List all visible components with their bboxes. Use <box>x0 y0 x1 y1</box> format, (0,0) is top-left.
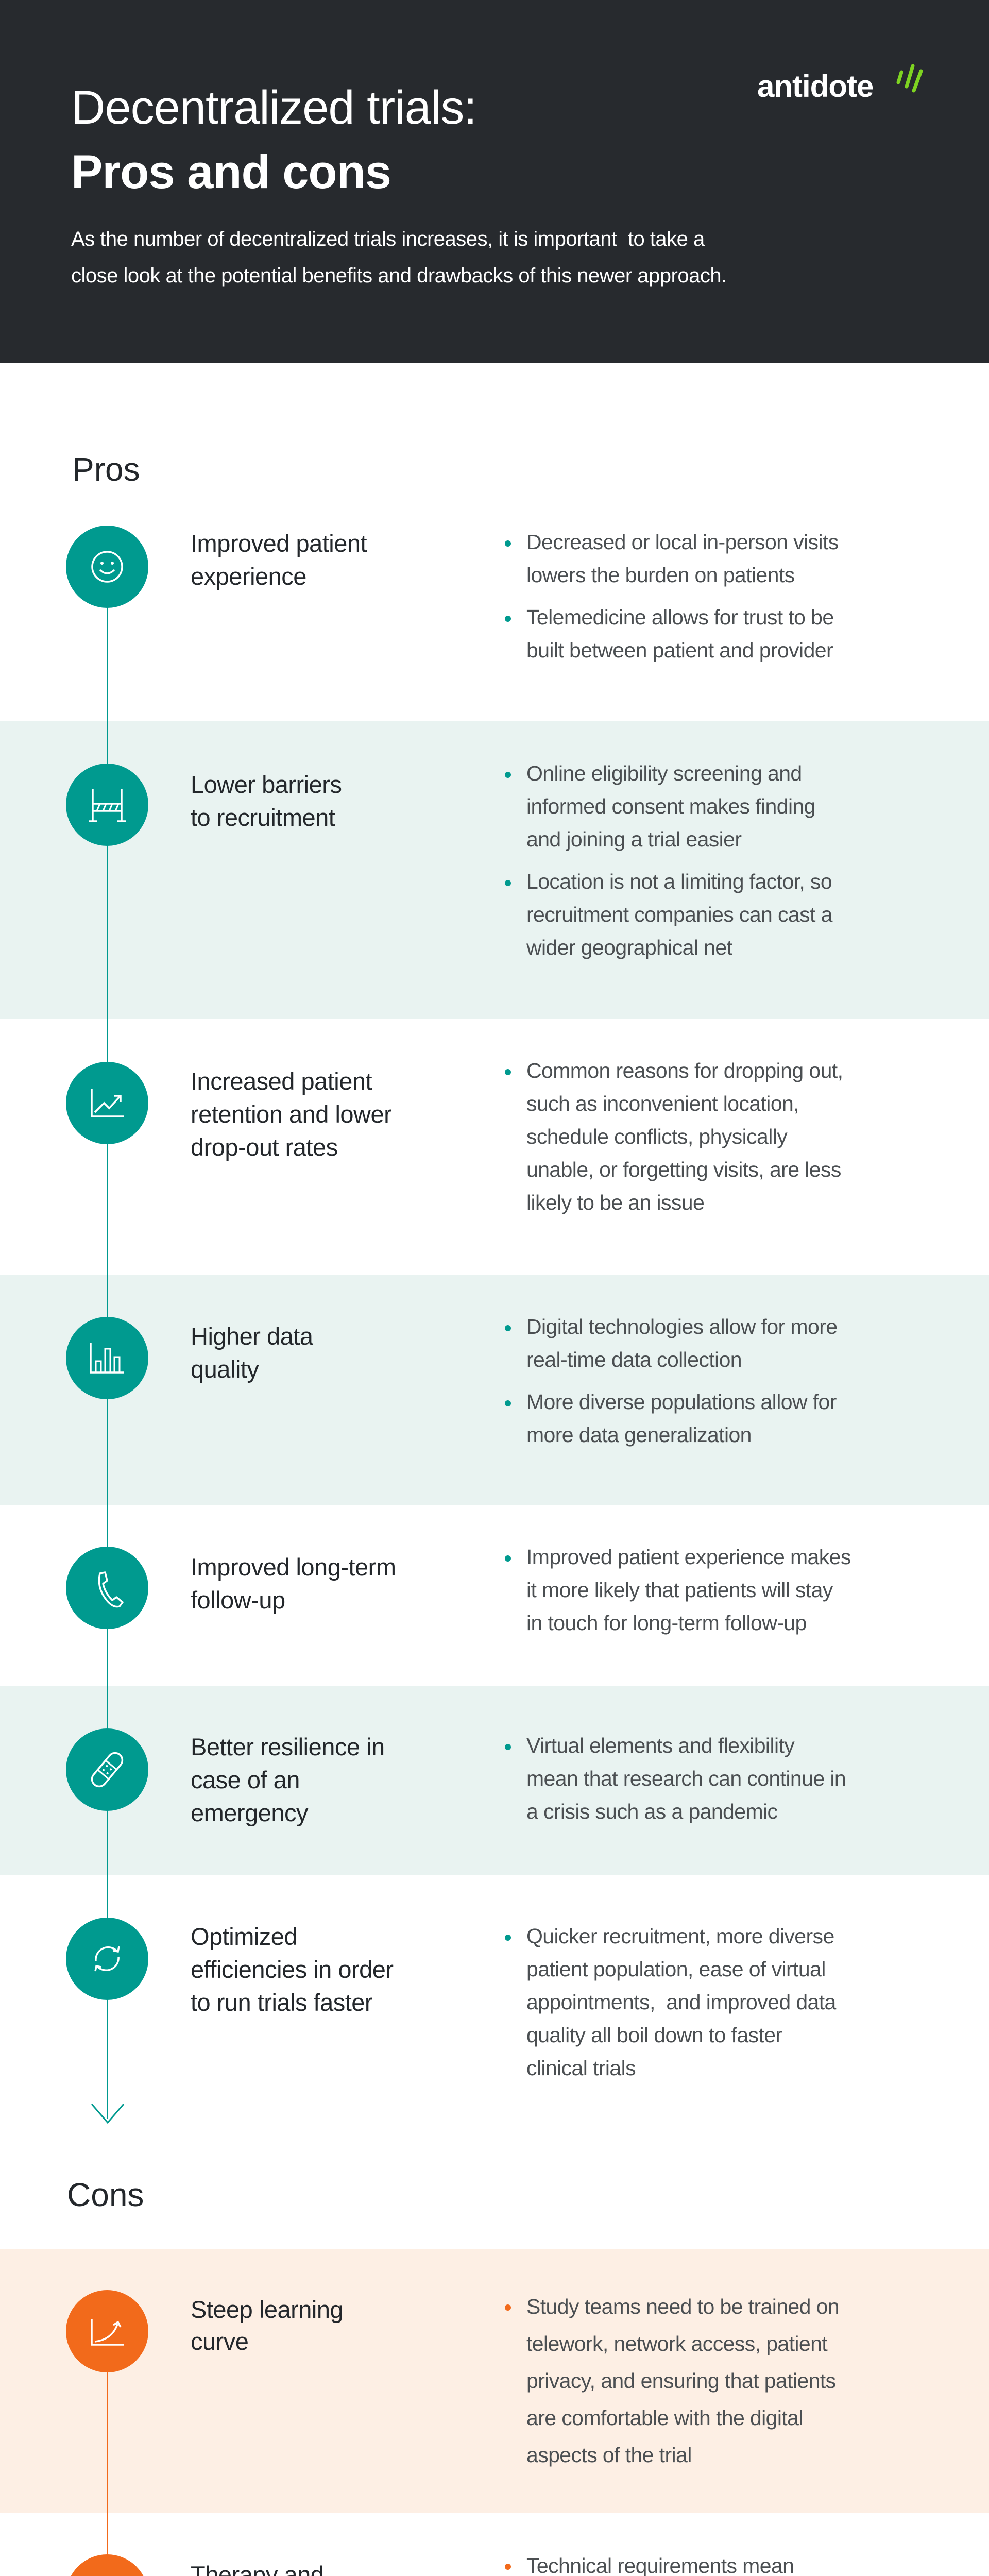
subtitle: As the number of decentralized trials increases, it is important to take a <box>71 228 705 250</box>
header <box>0 0 989 363</box>
bullets: Common reasons for dropping out, <box>526 1059 843 1082</box>
bullets: Virtual elements and flexibility <box>526 1734 794 1757</box>
title: Better resilience in <box>191 1733 385 1760</box>
title: to recruitment <box>191 804 335 831</box>
title <box>191 1733 385 1826</box>
title: Increased patient <box>191 1067 372 1095</box>
title: experience <box>191 563 306 590</box>
bullets: unable, or forgetting visits, are less <box>526 1158 841 1181</box>
bullets <box>505 1924 837 2080</box>
bullets: privacy, and ensuring that patients <box>526 2369 835 2393</box>
bullets: Online eligibility screening and <box>526 761 802 785</box>
subtitle <box>71 228 727 287</box>
bullets: more data generalization <box>526 1423 752 1447</box>
bullets <box>505 1734 846 1823</box>
title <box>191 1553 396 1614</box>
title <box>191 1067 391 1161</box>
bullets: informed consent makes finding <box>526 794 815 818</box>
title <box>71 81 476 198</box>
bullets <box>505 530 839 662</box>
title: Decentralized trials: <box>71 81 476 134</box>
icon: phone <box>66 1547 148 1629</box>
bullets: Location is not a limiting factor, so <box>526 870 832 893</box>
con backgrounds <box>0 2249 989 2513</box>
timeline: cons <box>107 2331 108 2576</box>
title: drop-out rates <box>191 1133 338 1161</box>
title <box>191 771 342 831</box>
bullets: mean that research can continue in <box>526 1767 846 1790</box>
title: curve <box>191 2328 248 2355</box>
title <box>191 1923 394 2016</box>
pro 3 <box>66 1059 843 1214</box>
pro 4 <box>66 1315 837 1447</box>
bullets: patient population, ease of virtual <box>526 1957 826 1981</box>
title: to run trials faster <box>191 1989 372 2016</box>
title: efficiencies in order <box>191 1956 394 1983</box>
pro 2 <box>66 761 832 959</box>
bullets: Decreased or local in-person visits <box>526 530 839 554</box>
title: follow-up <box>191 1586 285 1614</box>
title: Improved long-term <box>191 1553 396 1581</box>
pro 5 <box>66 1545 851 1635</box>
bullets <box>505 1315 837 1447</box>
bullets: likely to be an issue <box>526 1191 704 1214</box>
bullets: lowers the burden on patients <box>526 563 795 587</box>
title <box>191 1323 313 1383</box>
bullets <box>505 2295 839 2467</box>
bullets: a crisis such as a pandemic <box>526 1800 777 1823</box>
bullets: are comfortable with the digital <box>526 2406 803 2430</box>
subtitle: close look at the potential benefits and drawbacks of this newer approach. <box>71 264 727 287</box>
bullets: quality all boil down to faster <box>526 2023 782 2047</box>
title: Higher data <box>191 1323 313 1350</box>
title: emergency <box>191 1799 308 1826</box>
bullets: clinical trials <box>526 2056 636 2080</box>
bullets: in touch for long-term follow-up <box>526 1611 807 1635</box>
con 3 <box>0 0 989 1</box>
logo <box>757 64 923 104</box>
icon: bandage <box>66 1728 148 1811</box>
logo: antidote <box>757 69 873 104</box>
con 2 <box>71 2554 794 2576</box>
bullets <box>505 1545 851 1635</box>
bullets: Quicker recruitment, more diverse <box>526 1924 834 1948</box>
icon: rising chart <box>66 1062 148 1144</box>
bullets: appointments, and improved data <box>526 1990 836 2014</box>
title: case of an <box>191 1766 300 1793</box>
title: Improved patient <box>191 530 367 557</box>
arrow: pros timeline end <box>91 2104 125 2124</box>
icon: barrier <box>66 764 148 846</box>
pro 1 <box>66 526 839 662</box>
pro 6 <box>66 1728 846 1826</box>
timeline: pros <box>107 567 108 2119</box>
title: Lower barriers <box>191 771 342 798</box>
heading: Cons: Cons <box>67 2176 144 2213</box>
bullets: wider geographical net <box>526 936 732 959</box>
bullets: Study teams need to be trained on <box>526 2295 839 2318</box>
bullets: recruitment companies can cast a <box>526 903 832 926</box>
pro 7 <box>66 1918 837 2080</box>
title: retention and lower <box>191 1100 391 1128</box>
heading: Pros: Pros <box>72 451 140 488</box>
title: Optimized <box>191 1923 297 1950</box>
bullets: built between patient and provider <box>526 638 833 662</box>
icon: learning curve <box>66 2290 148 2372</box>
bullets <box>505 761 832 959</box>
bullets <box>505 1059 843 1214</box>
title <box>191 2296 343 2355</box>
bullets: it more likely that patients will stay <box>526 1578 833 1602</box>
bullets: Digital technologies allow for more <box>526 1315 837 1338</box>
bullets: and joining a trial easier <box>526 827 741 851</box>
bullets: More diverse populations allow for <box>526 1390 837 1414</box>
bullets: Improved patient experience makes <box>526 1545 851 1569</box>
icon: smiley <box>66 526 148 608</box>
icon: refresh <box>66 1918 148 2000</box>
title: quality <box>191 1355 259 1383</box>
icon: clipboard checklist <box>66 2554 148 2576</box>
row backgrounds <box>0 721 989 1019</box>
bullets: Telemedicine allows for trust to be <box>526 605 834 629</box>
title <box>191 530 367 590</box>
title: Pros and cons <box>71 146 391 198</box>
bullets: telework, network access, patient <box>526 2332 827 2355</box>
title: Steep learning <box>191 2296 343 2323</box>
con 1 <box>66 2290 839 2467</box>
bullets: real-time data collection <box>526 1348 742 1371</box>
bullets: aspects of the trial <box>526 2443 692 2467</box>
bullets: schedule conflicts, physically <box>526 1125 787 1148</box>
icon: bar chart <box>66 1317 148 1399</box>
bullets: such as inconvenient location, <box>526 1092 799 1115</box>
